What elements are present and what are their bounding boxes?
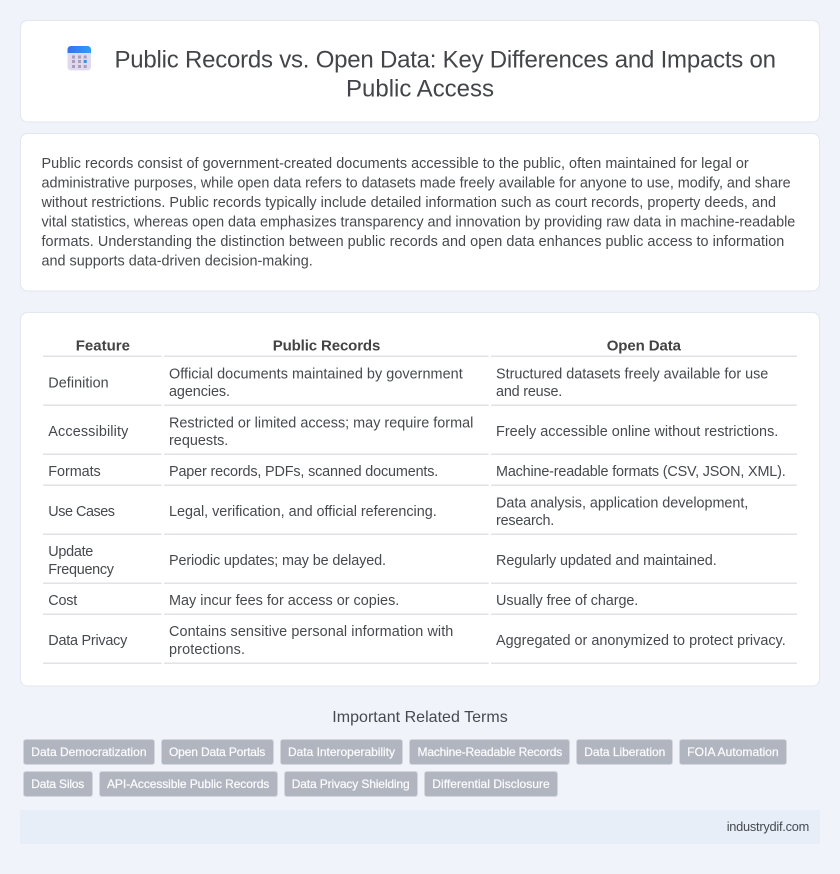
panel: introduction text: without restrictions. Public records typically include detailed information such as court records, property deeds, and [40,195,776,211]
row: accessibility: requests. [169,433,228,449]
panel: introduction text: Public records consist of government-created documents accessible to the public, often maintained for legal or [42,156,749,172]
heading: important related terms: Important Related Terms [332,709,508,726]
icon: calendar grid [68,46,91,70]
tag: open data portals [162,740,274,764]
tag: api-accessible public records [100,772,278,796]
row: use cases: Data analysis, application development, [496,495,748,511]
row: definition: and reuse. [496,384,562,400]
row: definition: agencies. [169,384,230,400]
row: cost [48,593,638,609]
tag: data silos: Data Silos [31,777,84,791]
panel: comparison table [20,312,820,686]
footer: industrydif.com [727,819,809,834]
row: data privacy [48,624,786,658]
row: cost: Cost [48,593,77,609]
row: formats: Formats [48,464,101,480]
row: update frequency: Periodic updates; may be delayed. [169,553,386,569]
panel: introduction text: and supports data-driven decision-making. [42,254,313,270]
panel: introduction text [20,134,820,291]
row: data privacy: Data Privacy [48,633,128,649]
footer [20,810,820,844]
row: use cases: research. [496,513,554,529]
table header row: Public Records [273,338,380,355]
tag: foia automation [680,740,786,764]
row: update frequency: Frequency [48,562,115,578]
title [114,46,776,102]
panel: introduction text: administrative purposes, while open data refers to datasets made freely available for anyone to use, modify, and share [42,176,791,192]
tag: open data portals: Open Data Portals [169,745,265,759]
row: formats: Paper records, PDFs, scanned documents. [169,464,438,480]
tag: machine-readable records: Machine-Readable Records [418,745,562,759]
tag: data silos [24,772,92,796]
table header row: Feature [76,338,130,355]
tag list: related terms [24,740,786,796]
panel: header [20,20,820,122]
table header row: Open Data [607,338,682,355]
row: accessibility: Freely accessible online without restrictions. [496,424,778,440]
tag: data democratization: Data Democratization [31,745,146,759]
tag: differential disclosure: Differential Disclosure [432,777,550,791]
row: data privacy: Aggregated or anonymized to protect privacy. [496,633,786,649]
row: cost: Usually free of charge. [496,593,638,609]
row: update frequency [48,544,717,578]
tag: data privacy shielding [284,772,418,796]
tag: differential disclosure [424,772,558,796]
row: definition: Structured datasets freely available for use [496,366,768,382]
tag: data privacy shielding: Data Privacy Shielding [292,777,410,791]
tag: data liberation: Data Liberation [584,745,665,759]
tag: data democratization [24,740,154,764]
table header row [76,338,682,355]
panel: introduction text: formats. Understanding the distinction between public records and open data enhances public access to information [42,234,784,250]
tag: data interoperability: Data Interoperability [288,745,395,759]
row: cost: May incur fees for access or copies. [169,593,399,609]
row: formats: Machine-readable formats (CSV, JSON, XML). [496,464,786,480]
row: update frequency: Regularly updated and maintained. [496,553,717,569]
title: Public Access [346,76,494,102]
row: accessibility: Restricted or limited access; may require formal [169,415,473,431]
title: Public Records vs. Open Data: Key Differences and Impacts on [114,46,776,74]
tag: foia automation: FOIA Automation [687,745,779,759]
row: data privacy: protections. [169,642,245,658]
row: accessibility [48,415,778,449]
row: accessibility: Accessibility [48,424,129,440]
row: data privacy: Contains sensitive personal information with [169,624,453,640]
row: use cases: Legal, verification, and official referencing. [169,504,437,520]
row: use cases [48,495,748,529]
tag: machine-readable records [410,740,570,764]
panel: introduction text: vital statistics, whereas open data emphasizes transparency and innovation by providing raw data in machine-readable [42,214,795,230]
tag: api-accessible public records: API-Accessible Public Records [107,777,269,791]
tag: data interoperability [280,740,402,764]
row: use cases: Use Cases [48,504,115,520]
row: definition: Definition [48,375,109,391]
row: formats [48,464,786,480]
row: update frequency: Update [48,544,93,560]
tag: data liberation [576,740,672,764]
row: definition [48,366,768,400]
row: definition: Official documents maintained by government [169,366,463,382]
